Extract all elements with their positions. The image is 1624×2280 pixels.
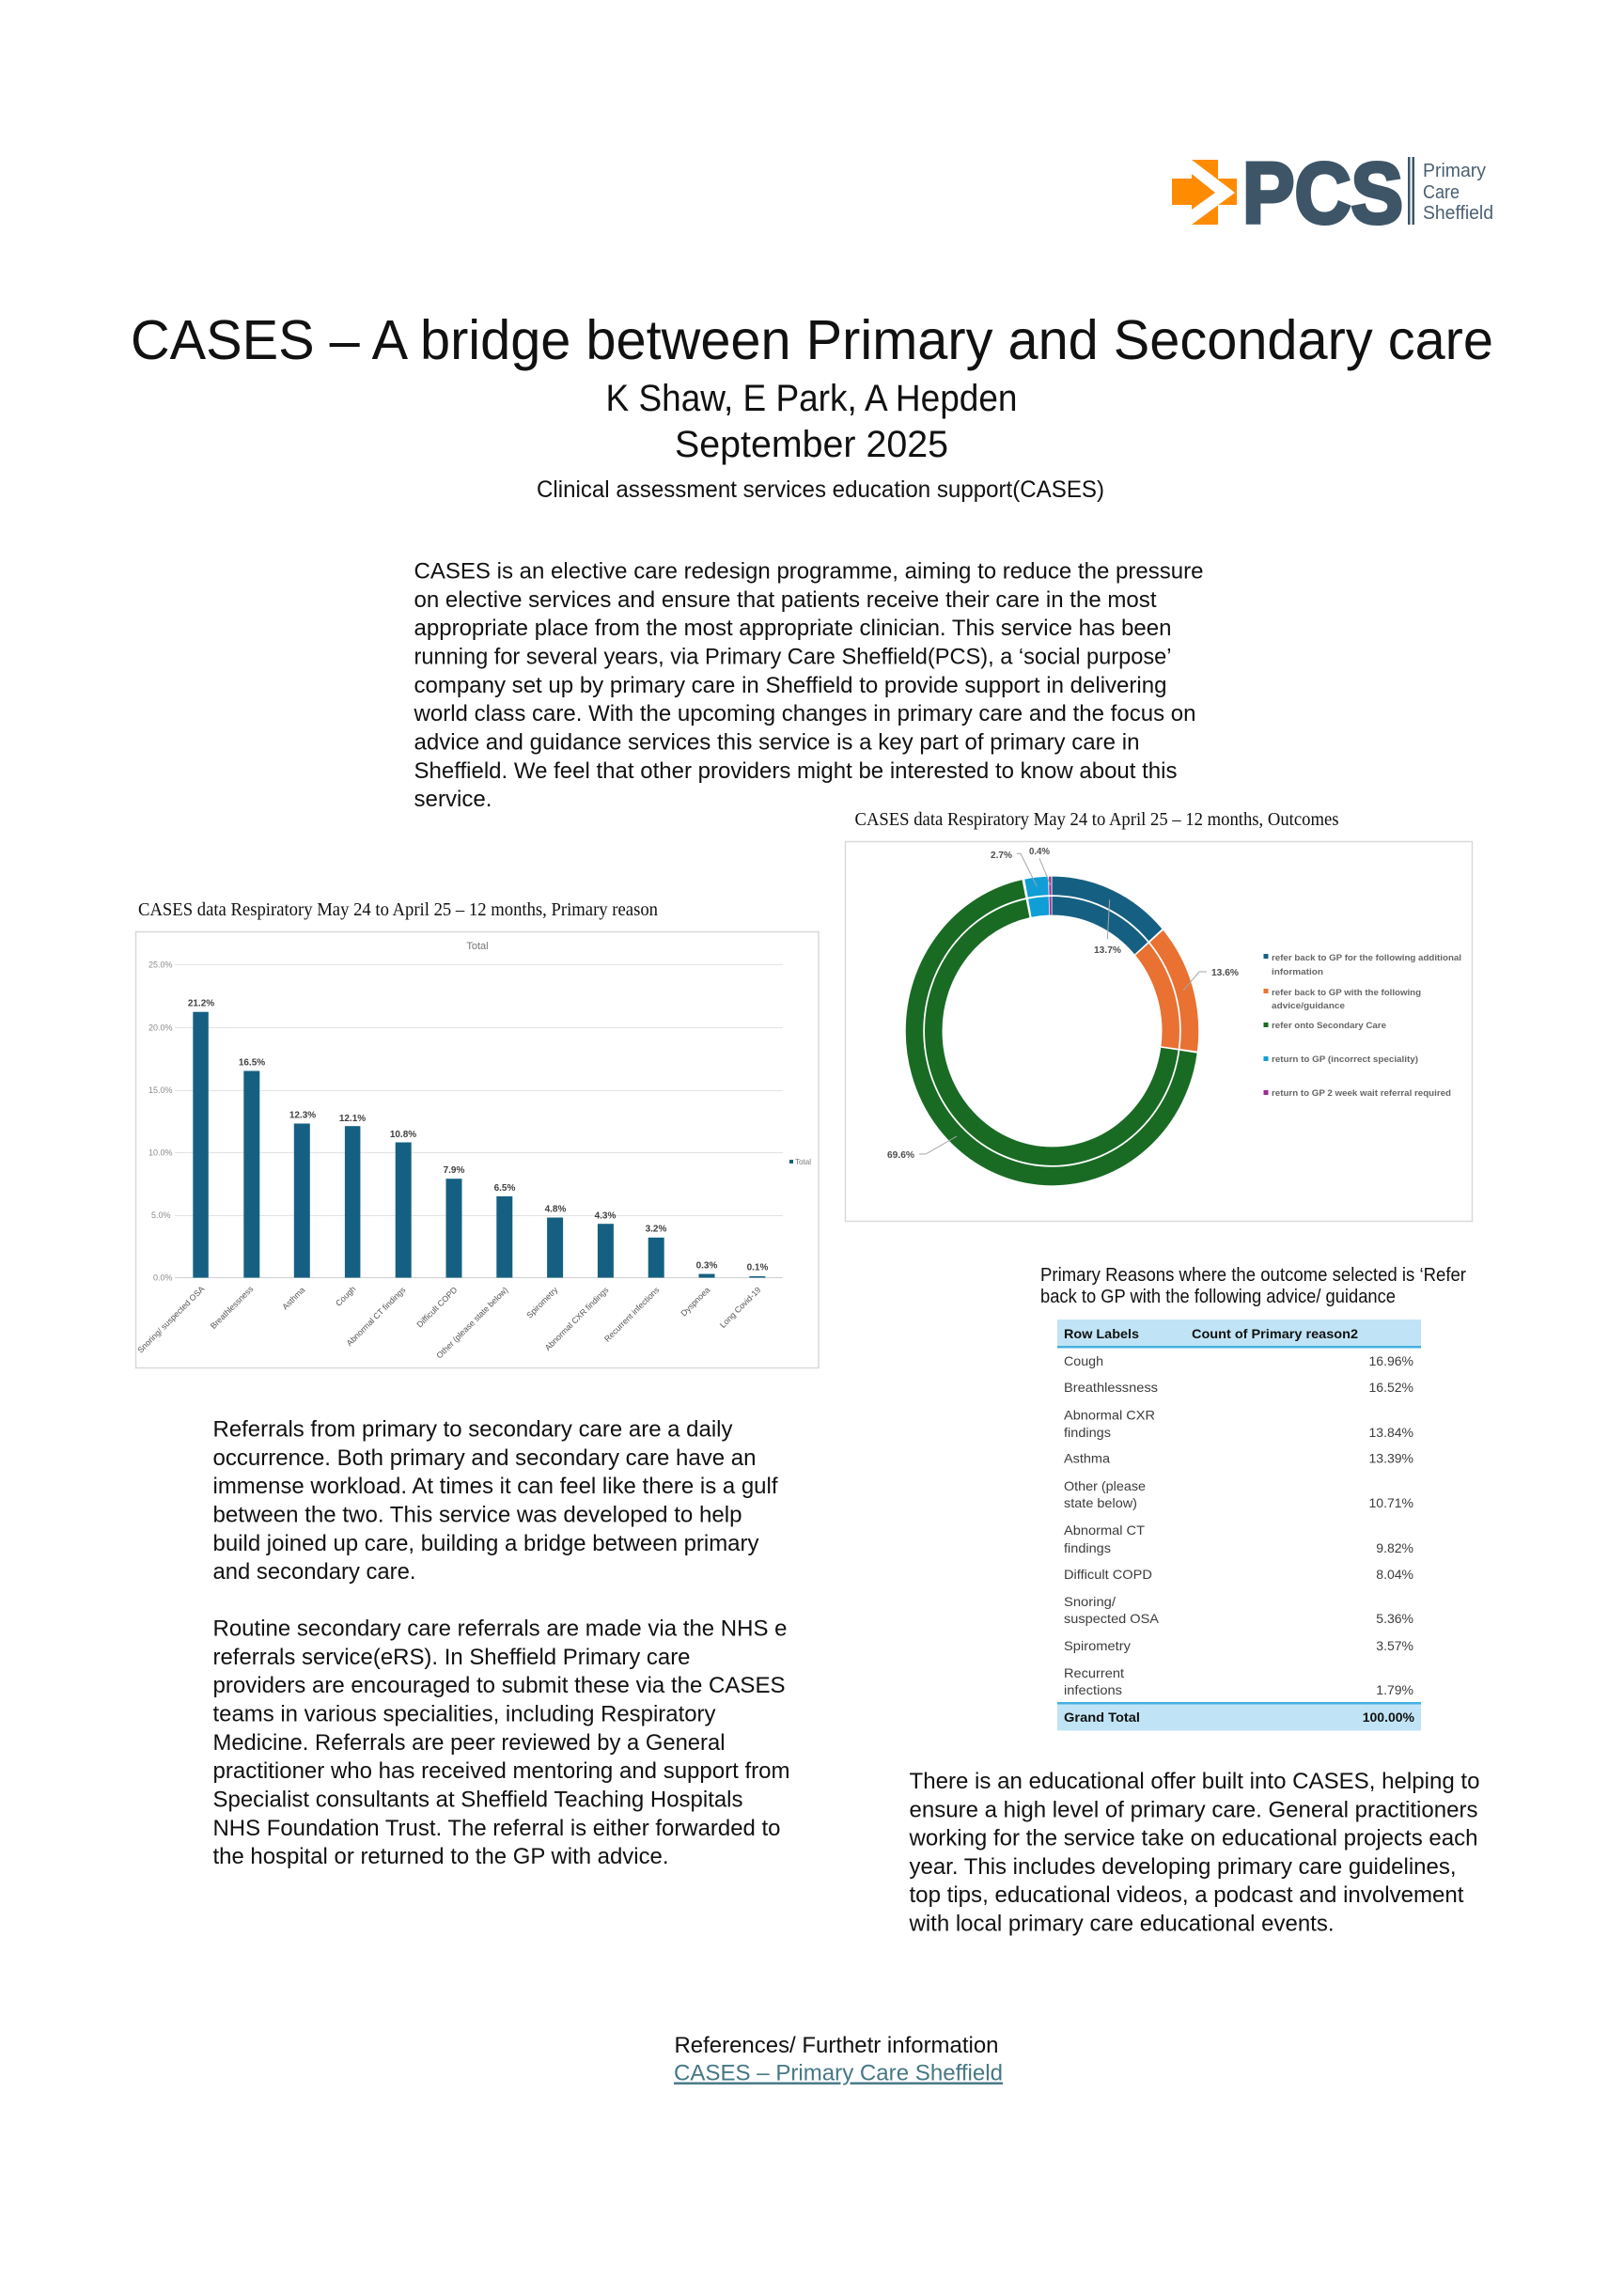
- bar value labels: 16.5%: [239, 1058, 265, 1068]
- text block: referrals: Referrals from primary to secondary care are a daily: [212, 1417, 733, 1442]
- table rows: 9.82%: [1376, 1540, 1413, 1555]
- category labels: Abnormal CT findings: [345, 1285, 408, 1348]
- date: September 2025: [675, 424, 948, 465]
- text block: education: There is an educational offer built into CASES, helping to: [910, 1769, 1479, 1794]
- table heading: back to GP with the following advice/ guidance: [1040, 1287, 1396, 1307]
- category labels: Other (please state below): [434, 1285, 509, 1360]
- table rows: 8.04%: [1376, 1567, 1413, 1582]
- category labels: Dyspnoea: [679, 1285, 711, 1318]
- bar chart legend: Total: [795, 1157, 811, 1166]
- donut value labels: 13.6%: [1211, 967, 1240, 978]
- table rows: Asthma: [1064, 1451, 1110, 1466]
- bar value labels: 0.3%: [696, 1261, 718, 1271]
- text block: introduction: advice and guidance services this service is a key part of primary care in: [414, 729, 1139, 756]
- text block: referrals: [212, 1417, 789, 1869]
- title: CASES – A bridge between Primary and Secondary care: [131, 308, 1493, 371]
- table grand total: 100.00%: [1363, 1710, 1415, 1725]
- text block: referrals: practitioner who has received mentoring and support from: [212, 1758, 789, 1784]
- table rows: Abnormal CT: [1064, 1523, 1145, 1538]
- table rows: findings: [1064, 1425, 1111, 1440]
- table rows: suspected OSA: [1064, 1611, 1160, 1626]
- y axis labels: 25.0%: [148, 960, 173, 970]
- references: References/ Furthetr information: [675, 2033, 998, 2058]
- text block: referrals: build joined up care, building a bridge between primary: [212, 1531, 759, 1556]
- donut legend: return to GP 2 week wait referral required: [1272, 1088, 1451, 1099]
- text block: referrals: occurrence. Both primary and secondary care have an: [212, 1445, 756, 1471]
- category labels: Cough: [334, 1284, 357, 1308]
- bar value labels: 12.3%: [289, 1111, 316, 1120]
- category labels: Spirometry: [524, 1285, 560, 1320]
- text block: introduction: service.: [414, 787, 492, 812]
- y axis labels: 15.0%: [148, 1085, 173, 1095]
- y axis labels: 0.0%: [153, 1273, 173, 1282]
- y axis labels: 10.0%: [148, 1148, 173, 1158]
- logo: Primary Care Sheffield: Care: [1423, 182, 1460, 203]
- subtitle: Clinical assessment services education support(CASES): [537, 476, 1104, 503]
- text block: referrals: and secondary care.: [212, 1559, 415, 1585]
- y axis labels: [148, 960, 173, 1282]
- bar value labels: 4.8%: [545, 1205, 567, 1214]
- category labels: Breathlessness: [209, 1284, 256, 1331]
- text block: referrals: NHS Foundation Trust. The referral is either forwarded to: [212, 1816, 780, 1841]
- table rows: Breathlessness: [1064, 1380, 1158, 1395]
- category labels: Recurrent infections: [602, 1285, 662, 1344]
- donut legend: refer onto Secondary Care: [1272, 1021, 1386, 1031]
- text block: introduction: appropriate place from the most appropriate clinician. This service has been: [414, 616, 1171, 641]
- bar value labels: 12.1%: [339, 1114, 366, 1124]
- category labels: Long Covid-19: [718, 1285, 762, 1330]
- category labels: [135, 1284, 762, 1360]
- donut legend: advice/guidance: [1272, 1001, 1345, 1011]
- text block: introduction: company set up by primary care in Sheffield to provide support in delivering: [414, 673, 1167, 698]
- donut legend: information: [1272, 967, 1323, 977]
- text block: introduction: running for several years, via Primary Care Sheffield(PCS), a ‘social purpose’: [414, 645, 1171, 669]
- table rows: 13.84%: [1369, 1425, 1413, 1440]
- y axis labels: 20.0%: [148, 1023, 173, 1032]
- text block: referrals: teams in various specialities, including Respiratory: [212, 1701, 716, 1727]
- text block: introduction: CASES is an elective care redesign programme, aiming to reduce the pressure: [414, 558, 1203, 585]
- logo: Primary Care Sheffield: [1172, 146, 1493, 242]
- table rows: 1.79%: [1376, 1682, 1413, 1697]
- panel: outcomes donut chart: [846, 842, 1472, 1222]
- table rows: Other (please: [1064, 1478, 1146, 1493]
- text block: referrals: providers are encouraged to submit these via the CASES: [212, 1673, 786, 1698]
- donut legend: refer back to GP for the following additional: [1272, 953, 1461, 963]
- bar value labels: 3.2%: [646, 1224, 667, 1235]
- table rows: [1064, 1353, 1413, 1697]
- table rows: 16.96%: [1369, 1353, 1413, 1368]
- category labels: Snoring/ suspected OSA: [135, 1284, 206, 1355]
- bar value labels: 21.2%: [188, 998, 214, 1009]
- donut rings: [914, 885, 1190, 1177]
- table header: Count of Primary reason2: [1192, 1326, 1358, 1341]
- table rows: Spirometry: [1064, 1638, 1131, 1653]
- bar value labels: 7.9%: [444, 1165, 465, 1176]
- table rows: Recurrent: [1064, 1665, 1124, 1680]
- donut leader lines: [919, 853, 1207, 1154]
- references: [674, 2033, 1003, 2086]
- table grand total: Grand Total: [1064, 1710, 1140, 1725]
- text block: education: year. This includes developing primary care guidelines,: [910, 1854, 1457, 1880]
- text block: introduction: [414, 558, 1204, 812]
- category labels: Difficult COPD: [414, 1285, 459, 1329]
- donut legend: refer back to GP with the following: [1272, 988, 1421, 998]
- donut value labels: 0.4%: [1029, 846, 1051, 857]
- bar value labels: 4.3%: [595, 1210, 617, 1222]
- table rows: infections: [1064, 1682, 1122, 1697]
- chart heading: primary reason: CASES data Respiratory May 24 to April 25 – 12 months, Primary reason: [138, 899, 658, 920]
- donut value labels: 2.7%: [991, 850, 1013, 861]
- panel: primary reason bar chart: Total: [466, 941, 489, 952]
- text block: education: ensure a high level of primary care. General practitioners: [910, 1797, 1477, 1823]
- bar value labels: [188, 998, 769, 1273]
- text block: referrals: the hospital or returned to the GP with advice.: [212, 1844, 669, 1869]
- category labels: Abnormal CXR findings: [543, 1285, 611, 1352]
- text block: introduction: world class care. With the upcoming changes in primary care and the focus on: [414, 701, 1196, 726]
- bar value labels: 10.8%: [390, 1130, 416, 1140]
- text block: education: with local primary care educational events.: [909, 1912, 1335, 1936]
- donut legend: return to GP (incorrect speciality): [1272, 1054, 1418, 1065]
- table grand total: [1057, 1702, 1421, 1731]
- text block: referrals: Medicine. Referrals are peer reviewed by a General: [212, 1730, 726, 1756]
- authors: K Shaw, E Park, A Hepden: [605, 378, 1017, 419]
- bar value labels: 6.5%: [494, 1183, 516, 1194]
- table rows: 3.57%: [1376, 1638, 1413, 1653]
- donut value labels: 13.7%: [1094, 945, 1122, 956]
- table rows: 10.71%: [1369, 1495, 1413, 1510]
- panel: primary reason bar chart: [135, 932, 819, 1368]
- table rows: Abnormal CXR: [1064, 1408, 1155, 1423]
- logo: Primary Care Sheffield: PCS: [1242, 146, 1403, 242]
- text block: introduction: on elective services and ensure that patients receive their care in the most: [414, 587, 1157, 613]
- table rows: Difficult COPD: [1064, 1567, 1152, 1582]
- bar value labels: 0.1%: [747, 1263, 769, 1273]
- donut value labels: 69.6%: [887, 1149, 915, 1161]
- y axis labels: 5.0%: [151, 1210, 171, 1220]
- text block: education: [909, 1769, 1479, 1936]
- logo: Primary Care Sheffield: Sheffield: [1423, 203, 1493, 224]
- bars: [193, 1012, 765, 1278]
- text block: introduction: Sheffield. We feel that other providers might be interested to know about this: [414, 758, 1177, 784]
- donut legend: [1263, 953, 1461, 1099]
- table: primary reasons: [1057, 1320, 1421, 1731]
- logo: Primary Care Sheffield: Primary: [1423, 161, 1486, 181]
- text block: referrals: Specialist consultants at Sheffield Teaching Hospitals: [212, 1788, 742, 1812]
- text block: referrals: between the two. This service was developed to help: [212, 1502, 742, 1528]
- donut value labels: [887, 846, 1240, 1161]
- table heading: Primary Reasons where the outcome selected is ‘Refer: [1040, 1265, 1466, 1286]
- chart heading: outcomes: CASES data Respiratory May 24 to April 25 – 12 months, Outcomes: [855, 809, 1339, 830]
- table rows: Cough: [1064, 1353, 1103, 1368]
- text block: referrals: Routine secondary care referrals are made via the NHS e: [212, 1616, 788, 1641]
- table rows: Snoring/: [1064, 1594, 1116, 1609]
- text block: referrals: immense workload. At times it can feel like there is a gulf: [212, 1474, 778, 1499]
- table rows: 5.36%: [1376, 1611, 1413, 1626]
- table rows: 16.52%: [1369, 1380, 1413, 1395]
- table rows: 13.39%: [1369, 1451, 1413, 1466]
- text block: education: working for the service take on educational projects each: [909, 1825, 1477, 1851]
- category labels: Asthma: [280, 1285, 306, 1312]
- text block: education: top tips, educational videos, a podcast and involvement: [910, 1882, 1464, 1908]
- table heading: [1040, 1265, 1466, 1307]
- table rows: findings: [1064, 1540, 1111, 1555]
- references: CASES – Primary Care Sheffield: [674, 2060, 1003, 2086]
- table header: [1057, 1320, 1421, 1348]
- text block: referrals: referrals service(eRS). In Sheffield Primary care: [212, 1645, 690, 1670]
- table header: Row Labels: [1064, 1326, 1139, 1341]
- table rows: state below): [1064, 1495, 1137, 1510]
